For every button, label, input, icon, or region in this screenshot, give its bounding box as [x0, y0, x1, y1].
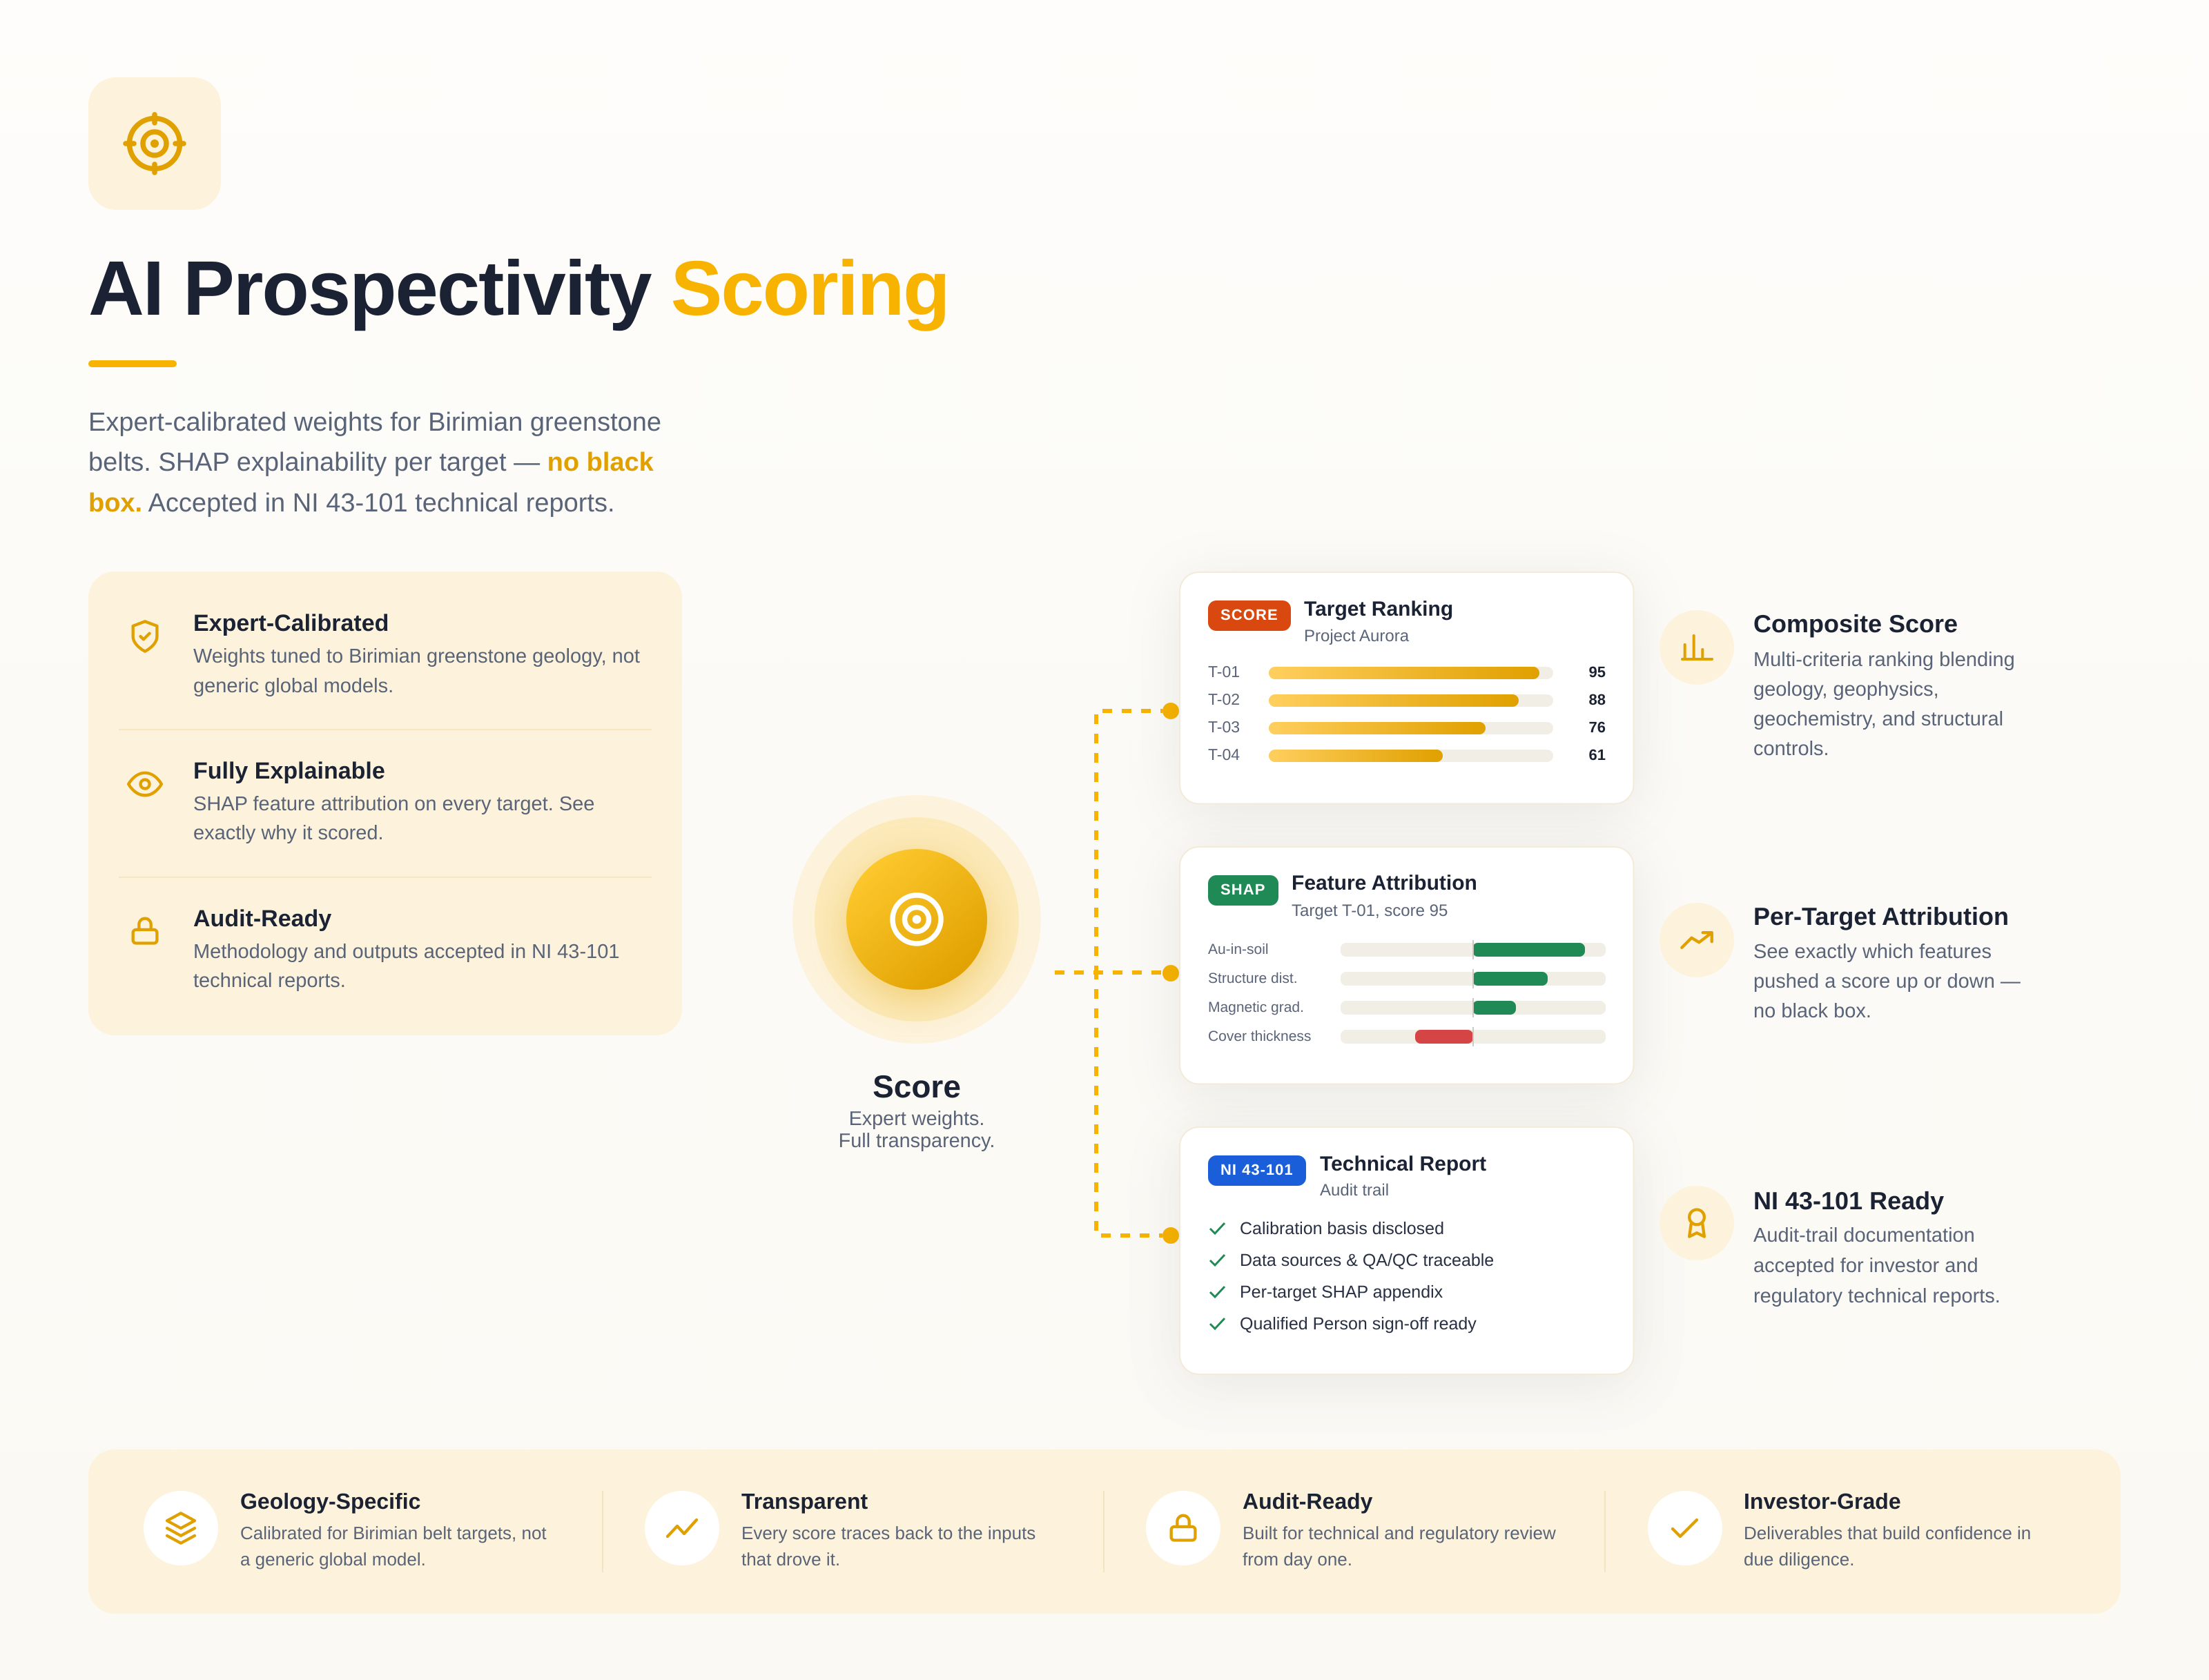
connector arrows from score to cards: [1055, 703, 1179, 1244]
callout: Composite Score: [1660, 609, 2015, 760]
feature: Investor-Grade: Deliverables that build confidence in: [1744, 1523, 2031, 1543]
icon: lock: [133, 919, 157, 943]
bar: T-03: T-03: [1208, 718, 1240, 736]
bar: T-04: T-04: [1208, 745, 1240, 763]
callout: Composite Score: controls.: [1753, 738, 1829, 760]
card heading: Technical Report: [1320, 1153, 1486, 1175]
card heading: [1292, 872, 1477, 920]
icon: award: [1689, 1210, 1704, 1237]
intro paragraph: box. Accepted in NI 43-101 technical reports.: [88, 489, 615, 518]
panel: key benefits: [88, 572, 682, 1035]
attribution: Au-in-soil: [1208, 940, 1606, 959]
feature: Audit-Ready: from day one.: [1243, 1549, 1352, 1570]
score label: Full transparency.: [839, 1130, 995, 1152]
callout: Per-Target Attribution: See exactly which features: [1753, 941, 1992, 963]
callout: Composite Score: geology, geophysics,: [1753, 678, 1939, 701]
logo badge: crosshair target: [88, 77, 221, 210]
card: target ranking bar chart: [1180, 572, 1633, 803]
card heading: Target Ranking: [1304, 598, 1453, 621]
badge: SHAP: SHAP: [1220, 881, 1266, 898]
card heading: Audit trail: [1320, 1181, 1389, 1200]
callout: Per-Target Attribution: [1660, 902, 2021, 1022]
benefit: Audit-Ready: Methodology and outputs accepted in NI 43-101: [193, 941, 619, 963]
icon: target: [893, 895, 941, 944]
checklist items: [1210, 1219, 1494, 1334]
callout: Per-Target Attribution: no black box.: [1753, 1000, 1871, 1022]
attribution: Au-in-soil: Au-in-soil: [1208, 941, 1269, 957]
attribution: Structure dist.: [1208, 969, 1606, 988]
feature: Geology-Specific: Calibrated for Birimian belt targets, not: [240, 1523, 547, 1543]
feature: Geology-Specific: [144, 1489, 547, 1570]
benefit: Expert-Calibrated: generic global models.: [193, 675, 393, 697]
icon: bar chart: [1682, 636, 1712, 659]
callout: Per-Target Attribution: pushed a score up or down —: [1753, 970, 2021, 993]
attribution: Structure dist.: Structure dist.: [1208, 970, 1298, 986]
feature: Investor-Grade: due diligence.: [1744, 1549, 1854, 1570]
feature: Transparent: [645, 1489, 1035, 1570]
icon: shield check: [133, 621, 157, 652]
bar: T-04: [1208, 745, 1606, 763]
benefit: Fully Explainable: Fully Explainable: [193, 758, 385, 784]
callout: Composite Score: Multi-criteria ranking blending: [1753, 649, 2015, 671]
callout: NI 43-101 Ready: Audit-trail documentation: [1753, 1224, 1975, 1247]
panel: bottom feature strip: [88, 1449, 2121, 1614]
bar: T-01: 95: [1589, 663, 1606, 681]
feature: Transparent: Transparent: [741, 1489, 868, 1514]
benefit: Fully Explainable: exactly why it scored.: [193, 822, 384, 844]
feature: Geology-Specific: Geology-Specific: [240, 1489, 420, 1514]
attribution: Cover thickness: [1208, 1027, 1606, 1046]
score label: Score: [873, 1068, 961, 1104]
bar: T-04: 61: [1589, 746, 1606, 763]
feature: Investor-Grade: Investor-Grade: [1744, 1489, 1901, 1514]
badge: SHAP: [1208, 875, 1278, 906]
feature: Geology-Specific: a generic global model.: [240, 1549, 426, 1570]
callout: NI 43-101 Ready: [1660, 1186, 2001, 1307]
benefit: Fully Explainable: SHAP feature attribution on every target. See: [193, 793, 594, 815]
feature: Audit-Ready: Audit-Ready: [1243, 1489, 1373, 1514]
badge: SCORE: SCORE: [1220, 606, 1278, 623]
benefit: Expert-Calibrated: [193, 610, 640, 697]
benefit: Fully Explainable: [193, 758, 594, 844]
score label: Expert weights.: [849, 1108, 984, 1130]
benefit: Expert-Calibrated: Expert-Calibrated: [193, 610, 389, 636]
callout: Per-Target Attribution: Per-Target Attribution: [1753, 902, 2009, 930]
attribution: Magnetic grad.: [1208, 998, 1606, 1017]
bar: T-02: T-02: [1208, 690, 1240, 708]
card heading: [1304, 598, 1453, 645]
bar: T-03: 76: [1589, 719, 1606, 736]
intro paragraph: Expert-calibrated weights for Birimian greenstone: [88, 408, 661, 437]
feature: Audit-Ready: Built for technical and regulatory review: [1243, 1523, 1556, 1543]
callout: NI 43-101 Ready: NI 43-101 Ready: [1753, 1186, 1944, 1215]
feature: Audit-Ready: [1146, 1489, 1556, 1570]
card heading: Project Aurora: [1304, 627, 1410, 645]
callout: Composite Score: geochemistry, and structural: [1753, 708, 2003, 730]
attribution: Cover thickness: Cover thickness: [1208, 1028, 1311, 1044]
badge: SCORE: [1208, 600, 1291, 631]
feature: Transparent: that drove it.: [741, 1549, 840, 1570]
feature: Investor-Grade: [1648, 1489, 2031, 1570]
attribution: Magnetic grad.: Magnetic grad.: [1208, 999, 1304, 1015]
score label: [839, 1068, 995, 1152]
bar: T-02: 88: [1589, 691, 1606, 708]
bar: T-03: [1208, 718, 1606, 736]
callout: NI 43-101 Ready: accepted for investor and: [1753, 1255, 1978, 1277]
checklist items: Data sources & QA/QC traceable: [1240, 1251, 1494, 1270]
bar: T-01: [1208, 663, 1606, 681]
benefit: Audit-Ready: technical reports.: [193, 970, 346, 992]
feature: Transparent: Every score traces back to the inputs: [741, 1523, 1035, 1543]
checklist items: Calibration basis disclosed: [1240, 1219, 1444, 1238]
callout: NI 43-101 Ready: regulatory technical reports.: [1753, 1285, 2001, 1307]
icon: eye: [128, 773, 162, 795]
benefit: Audit-Ready: [193, 906, 619, 992]
card: technical report checklist: [1180, 1127, 1633, 1374]
bar: T-02: [1208, 690, 1606, 708]
intro paragraph: [88, 408, 661, 518]
title underline accent: [88, 360, 177, 367]
card: feature attribution chart: [1180, 847, 1633, 1084]
central score orb: [792, 795, 1041, 1044]
title: AI Prospectivity Scoring: [88, 245, 949, 331]
card heading: [1320, 1153, 1486, 1200]
checklist items: Qualified Person sign-off ready: [1240, 1314, 1477, 1334]
checklist items: Per-target SHAP appendix: [1240, 1282, 1443, 1302]
benefit: Expert-Calibrated: Weights tuned to Birimian greenstone geology, not: [193, 645, 640, 667]
badge: NI 43-101: [1208, 1155, 1306, 1186]
card heading: Target T-01, score 95: [1292, 901, 1448, 920]
intro paragraph: belts. SHAP explainability per target — no black: [88, 448, 654, 477]
card heading: Feature Attribution: [1292, 872, 1477, 895]
badge: NI 43-101: NI 43-101: [1220, 1161, 1294, 1178]
bar: T-01: T-01: [1208, 663, 1240, 681]
icon: trending up: [1682, 932, 1712, 948]
callout: Composite Score: Composite Score: [1753, 609, 1958, 638]
benefit: Audit-Ready: Audit-Ready: [193, 906, 331, 932]
